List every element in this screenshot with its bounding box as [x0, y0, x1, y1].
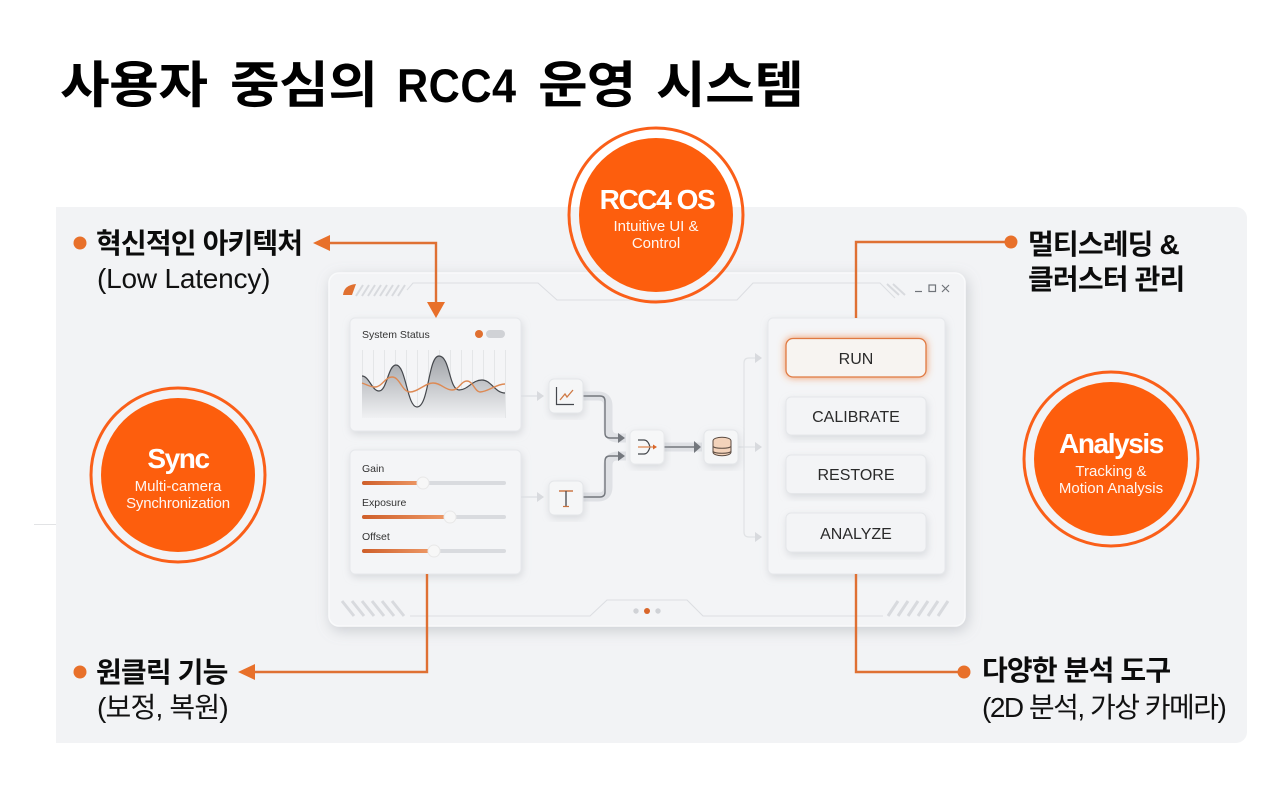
callout: one-click: 원클릭 기능	[96, 657, 228, 688]
title: RCC4	[397, 59, 517, 112]
badge: RCC4 OS: RCC4 OS	[600, 184, 715, 215]
badge: RCC4 OS: Intuitive UI &	[613, 218, 699, 235]
panel: sliders	[350, 450, 521, 574]
badge: Sync: Multi-camera	[135, 478, 222, 495]
button: restore	[786, 455, 926, 494]
badge: Analysis: Analysis	[1059, 428, 1164, 459]
button: restore: RESTORE	[817, 467, 895, 484]
icon: line chart	[549, 379, 583, 413]
badge: Sync: Synchronization	[126, 495, 230, 512]
callout: one-click: (보정, 복원)	[97, 692, 228, 723]
icon: database	[704, 430, 738, 464]
callout: innovative architecture: 혁신적인 아키텍처	[96, 228, 302, 259]
panel: system status chart: System Status	[362, 329, 430, 341]
slider: exposure: Exposure	[362, 497, 407, 509]
badge: Sync: Sync	[147, 443, 209, 474]
title: 시스템	[656, 58, 803, 114]
button: run	[786, 338, 926, 377]
slider: offset: Offset	[362, 531, 390, 543]
badge: Sync	[91, 388, 265, 562]
pager dots	[633, 608, 661, 614]
callout: analysis tools	[982, 655, 1226, 723]
icon: merge	[630, 430, 664, 464]
badge: Analysis: Motion Analysis	[1059, 480, 1163, 497]
panel: system status chart	[350, 318, 521, 431]
button: analyze: ANALYZE	[820, 526, 892, 543]
callout: multithreading and cluster	[1028, 229, 1184, 295]
title: 사용자	[60, 58, 207, 114]
title: 중심의	[230, 58, 377, 114]
panel: application window	[329, 273, 965, 626]
badge: Analysis	[1024, 372, 1198, 546]
callout: one-click	[74, 657, 228, 723]
callout: analysis tools: (2D 분석, 가상 카메라)	[982, 692, 1226, 723]
badge: RCC4 OS	[569, 128, 743, 302]
panel: action buttons	[768, 318, 945, 574]
title	[60, 58, 803, 114]
title: 운영	[538, 58, 635, 114]
connector: buttons to analysis tools	[856, 574, 970, 678]
flow connectors	[521, 353, 762, 542]
icon: text T	[549, 481, 583, 515]
button: analyze	[786, 513, 926, 552]
badge: Analysis: Tracking &	[1075, 463, 1147, 480]
callout: innovative architecture	[74, 228, 302, 294]
arrow: sliders to one-click	[238, 574, 427, 680]
button: calibrate: CALIBRATE	[812, 409, 900, 426]
slider: gain: Gain	[362, 463, 384, 475]
window controls	[915, 285, 949, 292]
badge: RCC4 OS: Control	[632, 235, 680, 252]
arrow: architecture to status	[313, 235, 445, 318]
slider: exposure	[362, 497, 506, 523]
button: calibrate	[786, 397, 926, 435]
callout: multithreading and cluster: 클러스터 관리	[1028, 264, 1184, 295]
callout: multithreading and cluster: 멀티스레딩 &	[1028, 229, 1179, 260]
callout: analysis tools: 다양한 분석 도구	[982, 655, 1170, 686]
connector: buttons to multithreading	[856, 236, 1018, 318]
callout: innovative architecture: (Low Latency)	[97, 263, 270, 294]
slider: offset	[362, 531, 506, 557]
panel: background	[56, 207, 1247, 743]
button: run: RUN	[839, 351, 873, 368]
slider: gain	[362, 463, 506, 489]
